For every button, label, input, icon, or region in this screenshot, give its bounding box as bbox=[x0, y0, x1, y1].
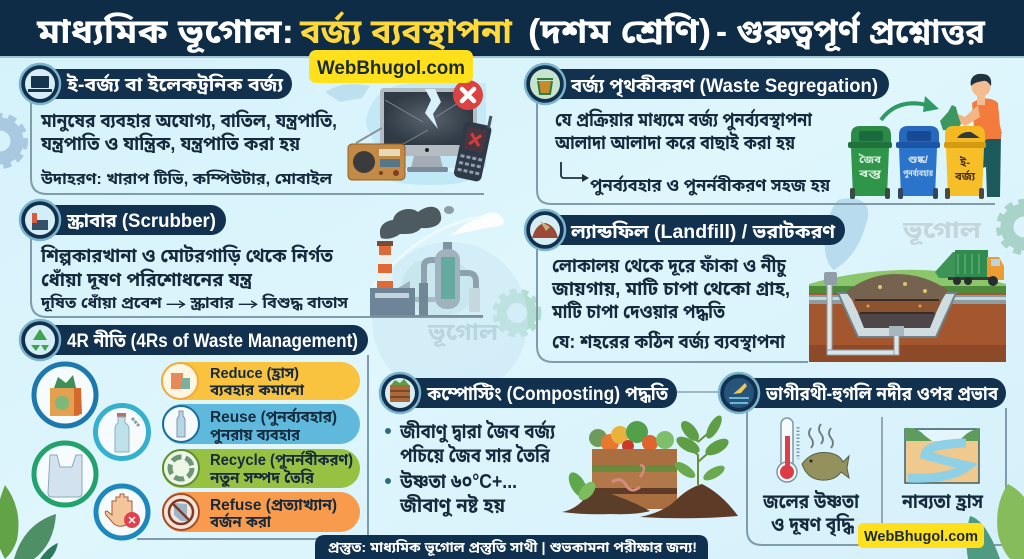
badge: WebBhugol top: WebBhugol.com bbox=[317, 58, 465, 79]
panel: 4R policy bbox=[20, 320, 368, 539]
item: refuse: বর্জন করা bbox=[209, 512, 271, 531]
decoration: leaves bbox=[0, 484, 1024, 559]
icon: blue bin: শুষ্ক/ bbox=[908, 155, 928, 166]
landfill text: মাটি চাপা দেওয়ার পদ্ধতি bbox=[551, 300, 726, 323]
arrow: elbow bbox=[561, 162, 589, 182]
composting bullets: পচিয়ে জৈব সার তৈরি bbox=[400, 443, 551, 467]
e-waste heading bbox=[20, 64, 292, 104]
landfill heading bbox=[525, 210, 845, 250]
badge: WebBhugol bottom bbox=[858, 523, 984, 548]
scrubber text: শিল্পকারখানা ও মোটরগাড়ি থেকে নির্গত bbox=[40, 244, 334, 267]
segregation text: আলাদা আলাদা করে বাছাই করা হয় bbox=[554, 132, 795, 154]
item: refuse: Refuse (প্রত্যাখ্যান) bbox=[210, 497, 337, 514]
composting bullets: জীবাণু নষ্ট হয় bbox=[399, 493, 506, 517]
title banner: (দশম শ্রেণি) bbox=[528, 11, 711, 51]
icon: compost crate and plant bbox=[562, 413, 738, 518]
item: reuse bbox=[162, 404, 360, 445]
landfill text: যে: শহরের কঠিন বর্জ্য ব্যবস্থাপনা bbox=[552, 330, 786, 353]
e-waste text: মানুষের ব্যবহার অযোগ্য, বাতিল, যন্ত্রপাতি, bbox=[40, 110, 337, 132]
footer bbox=[315, 535, 708, 559]
icon: green bin: জৈব bbox=[858, 154, 882, 166]
item: reuse: পুনরায় ব্যবহার bbox=[210, 427, 300, 445]
icon: factory with scrubber bbox=[370, 206, 504, 317]
label: water temperature: জলের উষ্ণতা bbox=[762, 489, 859, 513]
icon: person with bag and yellow bin: ই- bbox=[959, 156, 970, 169]
icon: person with bag and yellow bin bbox=[940, 74, 1002, 199]
segregation heading: বর্জ্য পৃথকীকরণ (Waste Segregation) bbox=[570, 74, 878, 98]
icon: shopping bag circle bbox=[34, 364, 96, 426]
e-waste text: যন্ত্রপাতি ও যান্ত্রিক, যন্ত্রপাতি করা হয় bbox=[40, 133, 300, 155]
title banner: মাধ্যমিক ভূগোল: bbox=[36, 11, 294, 54]
footer: প্রস্তুত: মাধ্যমিক ভূগোল প্রস্তুতি সাথী | শুভকামনা পরীক্ষার জন্য! bbox=[328, 539, 697, 557]
icon: green bin bbox=[848, 126, 892, 199]
item: refuse bbox=[162, 492, 360, 532]
4R heading: 4R নীতি (4Rs of Waste Management) bbox=[67, 330, 358, 352]
item: recycle: Recycle (পুনর্নবীকরণ) bbox=[210, 450, 353, 470]
composting heading: কম্পোস্টিং (Composting) পদ্ধতি bbox=[426, 382, 669, 405]
segregation text bbox=[554, 108, 813, 154]
icon: thermometer and fish bbox=[777, 418, 849, 482]
panel: e-waste bbox=[20, 64, 494, 194]
landfill text: জায়গায়, মাটি চাপা থেকো গ্রাহ, bbox=[551, 277, 790, 300]
landfill heading: ল্যান্ডফিল (Landfill) / ভরাটকরণ bbox=[570, 221, 836, 243]
title banner: বর্জ্য ব্যবস্থাপনা bbox=[299, 11, 512, 51]
icon: river landscape bbox=[905, 428, 979, 483]
composting heading bbox=[380, 373, 720, 413]
badge: WebBhugol top bbox=[309, 50, 473, 83]
arrow: into bin bbox=[881, 96, 939, 120]
e-waste text: উদাহরণ: খারাপ টিভি, কম্পিউটার, মোবাইল bbox=[40, 169, 333, 188]
panel: scrubber bbox=[20, 200, 504, 317]
item: reuse: Reuse (পুনর্ব্যবহার) bbox=[210, 407, 337, 427]
segregation heading bbox=[525, 64, 889, 104]
item: reduce: ব্যবহার কমানো bbox=[209, 382, 305, 399]
title banner bbox=[0, 0, 1024, 58]
composting bullets bbox=[385, 419, 555, 517]
e-waste text bbox=[40, 110, 337, 188]
item: recycle: নতুন সম্পদ তৈরি bbox=[209, 469, 314, 489]
scrubber text: দূষিত ধোঁয়া প্রবেশ ⟶ স্ক্রাবার ⟶ বিশুদ্ধ বাতাস bbox=[40, 293, 349, 312]
segregation result: পুনর্ব্যবহার ও পুনর্নবীকরণ সহজ হয় bbox=[590, 175, 831, 196]
composting bullets: জীবাণু দ্বারা জৈব বর্জ্য bbox=[399, 419, 555, 443]
panel: composting bbox=[380, 373, 738, 518]
background: ভূগোল bbox=[427, 319, 499, 347]
4R heading bbox=[20, 320, 368, 360]
icon: hand stop circle bbox=[96, 486, 148, 538]
icon: blue bin bbox=[896, 126, 940, 199]
river heading bbox=[719, 373, 1006, 413]
river heading: ভাগীরথী-হুগলি নদীর ওপর প্রভাব bbox=[765, 383, 999, 405]
icon: landfill cross-section with truck bbox=[809, 250, 1006, 362]
segregation text: যে প্রক্রিয়ার মাধ্যমে বর্জ্য পুনর্ব্যবস্থাপনা bbox=[555, 108, 813, 131]
scrubber text: ধোঁয়া দূষণ পরিশোধনের যন্ত্র bbox=[41, 268, 253, 291]
scrubber text bbox=[40, 244, 349, 312]
item: reduce bbox=[162, 362, 360, 400]
icon: bottle circle bbox=[96, 406, 148, 458]
panel: landfill bbox=[525, 210, 1006, 362]
label: water temperature: ও দূষণ বৃদ্ধি bbox=[771, 512, 855, 537]
icon: plastic bag circle bbox=[34, 443, 96, 505]
item: recycle bbox=[162, 449, 360, 489]
icon: green bin: বস্তু bbox=[857, 169, 882, 180]
item: reduce: Reduce (হ্রাস) bbox=[210, 365, 299, 382]
label: navigability: নাব্যতা হ্রাস bbox=[901, 491, 984, 513]
landfill text: লোকালয় থেকে দূরে ফাঁকা ও নীচু bbox=[552, 254, 787, 278]
icon: broken computer, radio and phone bbox=[348, 80, 494, 185]
landfill text bbox=[551, 254, 790, 353]
composting bullets: উষ্ণতা ৬০°C+... bbox=[399, 469, 517, 493]
title banner: - গুরুত্বপূর্ণ প্রশ্নোত্তর bbox=[716, 11, 986, 53]
badge: WebBhugol bottom: WebBhugol.com bbox=[864, 529, 978, 545]
label: water temperature bbox=[762, 489, 859, 537]
icon: blue bin: পুনর্ব্যবহার bbox=[903, 167, 933, 179]
scrubber heading bbox=[20, 200, 226, 240]
panel: river impact bbox=[719, 373, 1006, 545]
e-waste heading: ই-বর্জ্য বা ইলেকট্রনিক বর্জ্য bbox=[66, 73, 284, 96]
background: ভূগোল bbox=[902, 217, 982, 245]
scrubber heading: স্ক্রাবার (Scrubber) bbox=[66, 211, 216, 232]
icon: person with bag and yellow bin: বর্জ্য bbox=[954, 169, 976, 183]
panel: waste segregation bbox=[525, 64, 1002, 204]
